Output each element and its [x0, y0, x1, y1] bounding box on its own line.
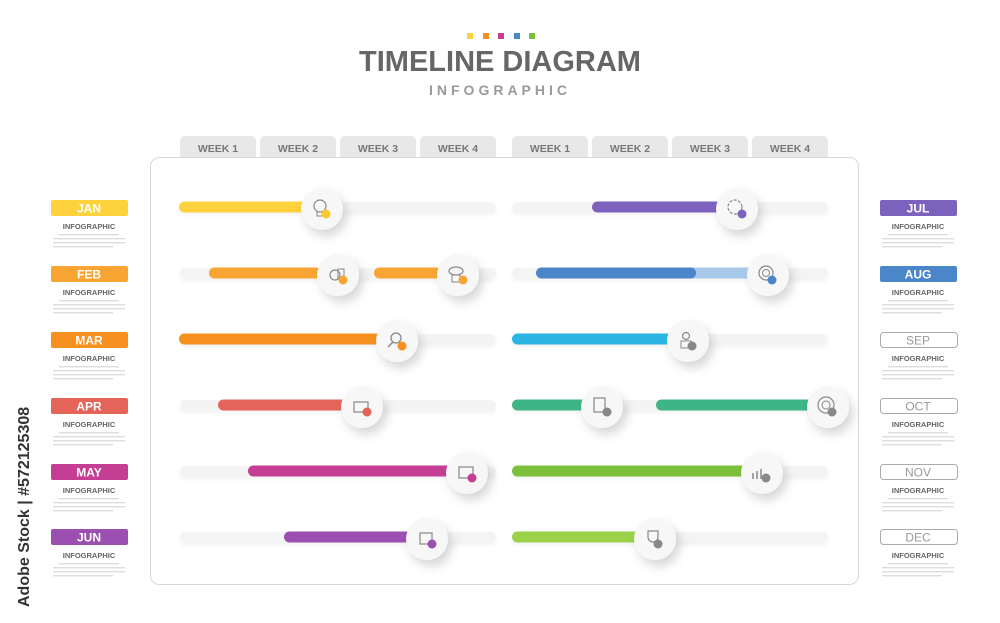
milestone icons: [301, 188, 849, 560]
icon: cloud FEB: [437, 254, 479, 296]
label: APR: APR: [76, 400, 102, 414]
icon: gear JUL: [716, 188, 758, 230]
label: JUL: [880, 200, 957, 247]
week tabs: WEEK 4: [438, 143, 478, 155]
watermark id text: Adobe Stock | #572125308: [16, 407, 33, 607]
week tabs: WEEK 1: [198, 143, 238, 155]
week tabs: WEEK 2: [278, 143, 318, 155]
color dots: [467, 33, 535, 39]
label: AUG: [880, 266, 957, 313]
label: JAN: [51, 200, 128, 247]
label: AUG: INFOGRAPHIC: [892, 288, 945, 297]
week tabs: [180, 136, 828, 160]
icon: person SEP: [667, 320, 709, 362]
icon: lightbulb JAN: [301, 188, 343, 230]
label: OCT: OCT: [905, 400, 931, 414]
subtitle: INFOGRAPHIC: [429, 82, 571, 98]
icon: dollar target AUG: [747, 254, 789, 296]
label: DEC: [880, 530, 958, 576]
label: JAN: JAN: [77, 202, 101, 216]
label: NOV: NOV: [905, 466, 931, 480]
title block: [359, 33, 641, 98]
label: FEB: [51, 266, 128, 313]
label: OCT: [880, 398, 958, 445]
label: FEB: FEB: [77, 268, 101, 282]
label: MAR: MAR: [75, 334, 103, 348]
icon: browser MAY: [446, 452, 488, 494]
label: JUN: [51, 529, 128, 576]
label: NOV: [880, 464, 958, 511]
week tabs: WEEK 4: [770, 143, 810, 155]
label: SEP: [880, 332, 958, 379]
label: MAY: MAY: [76, 466, 102, 480]
label: MAY: INFOGRAPHIC: [63, 486, 116, 495]
tracks: [180, 202, 828, 542]
month labels right: [880, 200, 958, 576]
icon: target OCT: [807, 386, 849, 428]
icon: magnifier MAR: [376, 320, 418, 362]
label: MAR: INFOGRAPHIC: [63, 354, 116, 363]
week tabs: WEEK 2: [610, 143, 650, 155]
icon: briefcase APR: [341, 386, 383, 428]
label: JUN: INFOGRAPHIC: [63, 551, 116, 560]
label: FEB: INFOGRAPHIC: [63, 288, 116, 297]
title: TIMELINE DIAGRAM: [359, 46, 641, 78]
label: AUG: AUG: [905, 268, 931, 282]
label: JAN: INFOGRAPHIC: [63, 222, 116, 231]
bars: [179, 202, 824, 542]
main panel: [150, 158, 858, 584]
label: JUL: INFOGRAPHIC: [892, 222, 945, 231]
label: JUL: JUL: [907, 202, 929, 216]
label: MAR: [51, 332, 128, 379]
label: SEP: INFOGRAPHIC: [892, 354, 945, 363]
label: MAY: [51, 464, 128, 511]
label: JUN: JUN: [77, 530, 101, 544]
label: DEC: INFOGRAPHIC: [892, 551, 945, 560]
icon: trophy DEC: [634, 518, 676, 560]
week tabs: WEEK 3: [690, 143, 730, 155]
label: OCT: INFOGRAPHIC: [892, 420, 945, 429]
label: DEC: DEC: [905, 530, 931, 544]
month labels left: [51, 200, 128, 576]
label: NOV: INFOGRAPHIC: [892, 486, 945, 495]
icon: money FEB: [317, 254, 359, 296]
week tabs: WEEK 3: [358, 143, 398, 155]
icon: chart NOV: [741, 452, 783, 494]
week tabs: WEEK 1: [530, 143, 570, 155]
icon: checklist OCT: [581, 386, 623, 428]
icon: puzzle JUN: [406, 518, 448, 560]
label: SEP: SEP: [906, 334, 930, 348]
label: APR: [51, 398, 128, 445]
label: APR: INFOGRAPHIC: [63, 420, 116, 429]
